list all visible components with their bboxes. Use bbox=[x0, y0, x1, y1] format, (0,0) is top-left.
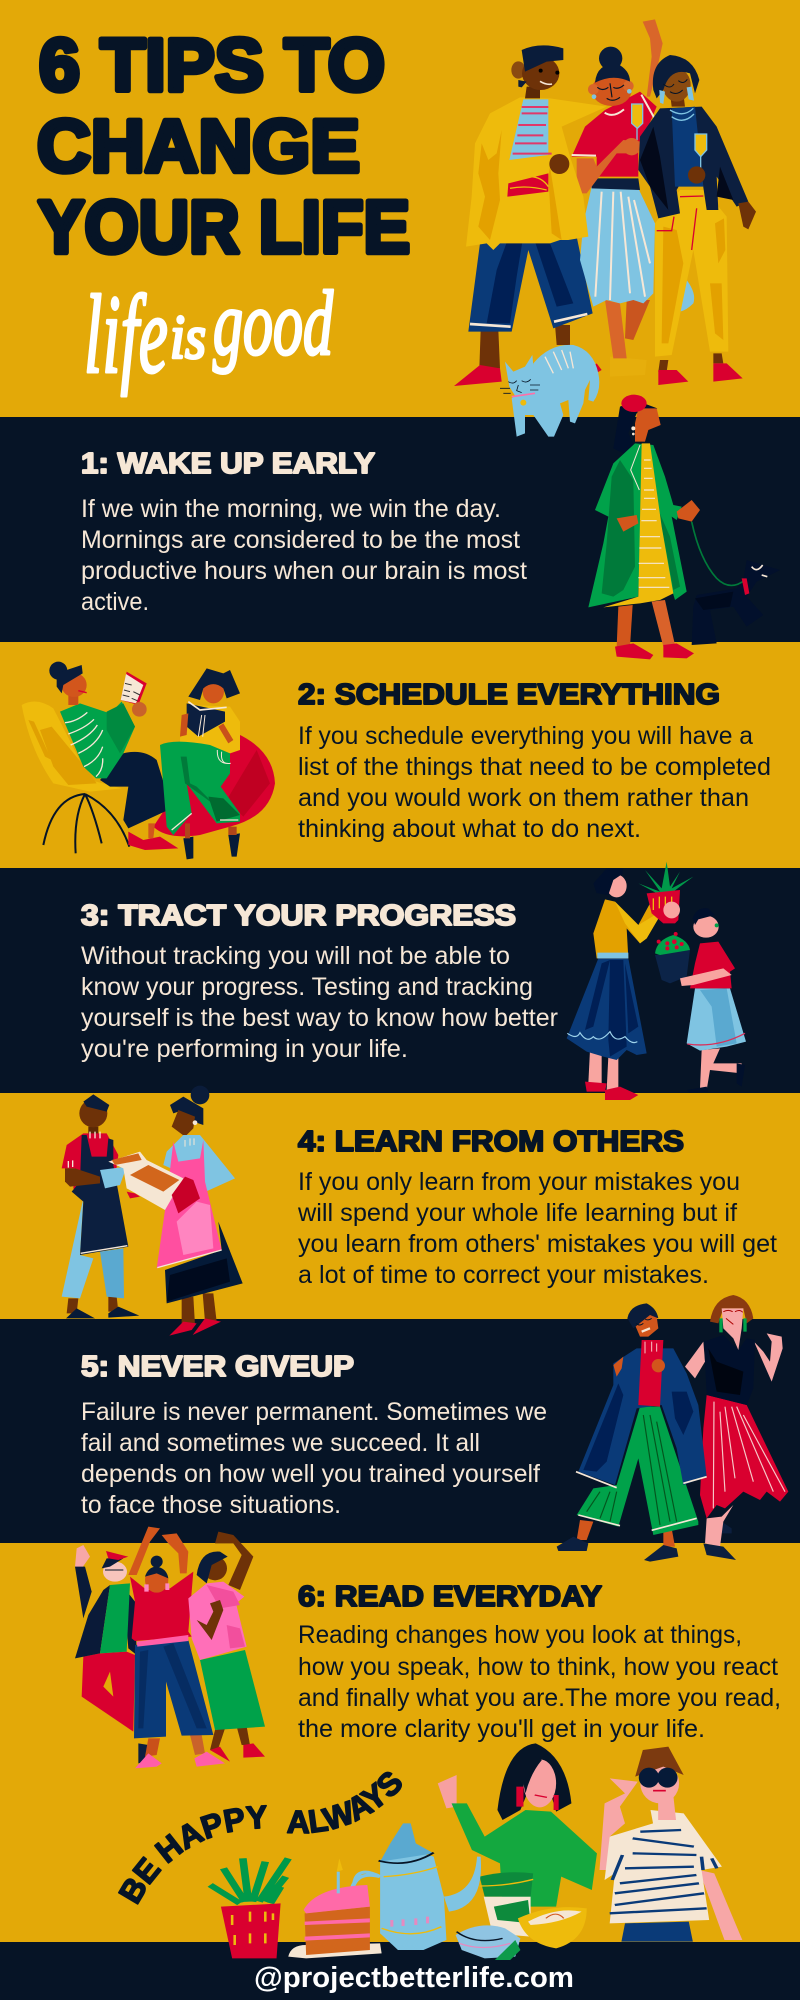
illustration: couple walking bbox=[557, 1295, 788, 1562]
tip 5 body text: depends on how well you trained yourself bbox=[81, 1460, 540, 1488]
tip 3 body text: Without tracking you will not be able to bbox=[81, 942, 510, 970]
yellow chair bbox=[22, 702, 129, 853]
tip 6 body text: how you speak, how to think, how you react bbox=[298, 1653, 778, 1681]
tip 5 body text bbox=[81, 1398, 547, 1519]
tip 6 body text bbox=[298, 1621, 781, 1743]
tip 4 body text bbox=[297, 1168, 777, 1289]
baker right bbox=[157, 1086, 243, 1336]
title bbox=[37, 24, 410, 268]
tip 6 heading: 6: READ EVERYDAY bbox=[298, 1581, 602, 1613]
tip 4 body text: a lot of time to correct your mistakes. bbox=[298, 1261, 709, 1289]
tip 5 body text: fail and sometimes we succeed. It all bbox=[81, 1429, 480, 1457]
tip 5 heading: 5: NEVER GIVEUP bbox=[81, 1351, 354, 1383]
panel: footer background bbox=[0, 1942, 800, 2000]
tip 4 body text: you learn from others' mistakes you will get bbox=[298, 1230, 777, 1258]
teacup bbox=[456, 1925, 520, 1960]
baker left bbox=[62, 1094, 139, 1318]
woman legs and shoes bbox=[615, 600, 694, 659]
man in striped shirt bbox=[599, 1747, 742, 1942]
illustration: woman and girl with plants bbox=[567, 862, 746, 1100]
title: 6 TIPS TO bbox=[39, 24, 385, 106]
panel: tip 3 background bbox=[0, 868, 800, 1093]
plant held high bbox=[638, 862, 693, 923]
tip 1 body text bbox=[81, 495, 527, 616]
woman in red skirt bbox=[685, 1295, 788, 1560]
tip 5 bbox=[81, 1351, 547, 1519]
cat bbox=[500, 345, 599, 437]
dog leash and dog bbox=[692, 522, 780, 645]
tip 6 body text: Reading changes how you look at things, bbox=[298, 1621, 742, 1649]
woman in green sweater bbox=[438, 1743, 597, 1907]
script lettering: life is good: life bbox=[84, 273, 168, 397]
tip 3 body text: you're performing in your life. bbox=[81, 1035, 408, 1063]
tip 4 body text: will spend your whole life learning but if bbox=[297, 1199, 737, 1227]
baking dish and mitt bbox=[108, 1152, 200, 1213]
woman figure bbox=[567, 868, 663, 1100]
tip 3 heading: 3: TRACT YOUR PROGRESS bbox=[81, 900, 516, 932]
friend middle shirt, head bbox=[572, 47, 657, 193]
tip 2 body text: thinking about what to do next. bbox=[298, 815, 641, 843]
reader right bbox=[160, 668, 240, 859]
jar bbox=[480, 1872, 533, 1937]
panel: tip 5 background bbox=[0, 1319, 800, 1543]
girl figure bbox=[655, 908, 746, 1093]
tip 5 body text: Failure is never permanent. Sometimes we bbox=[81, 1398, 547, 1426]
friend right trousers and shoes bbox=[655, 190, 743, 385]
script lettering: life is good bbox=[84, 272, 334, 397]
reader left bbox=[49, 662, 178, 850]
friend right jacket, head bbox=[638, 55, 756, 229]
friend left trousers bbox=[468, 193, 593, 332]
potted plant bbox=[210, 1858, 288, 1958]
friend in red shirt bbox=[128, 1527, 225, 1768]
tip 3 bbox=[81, 900, 558, 1063]
tip 6 body text: the more clarity you'll get in your life. bbox=[298, 1715, 705, 1743]
tip 3 body text: yourself is the best way to know how better bbox=[81, 1004, 558, 1032]
script lettering: life is good: good bbox=[213, 272, 334, 374]
yellow bowl bbox=[518, 1907, 587, 1948]
illustration: two women reading bbox=[22, 662, 275, 859]
footer handle: @projectbetterlife.com bbox=[254, 1962, 574, 1994]
illustration: three friends and cat bbox=[454, 19, 756, 437]
illustration: still life and two friends at table bbox=[210, 1743, 742, 1960]
tip 4 body text: If you only learn from your mistakes you bbox=[298, 1168, 740, 1196]
tip 3 body text bbox=[81, 942, 558, 1063]
illustration: woman walking black dog bbox=[588, 395, 780, 659]
tip 1 body text: productive hours when our brain is most bbox=[81, 557, 527, 585]
tip 2 body text bbox=[298, 722, 771, 843]
tip 4 bbox=[297, 1126, 777, 1289]
friend in pink shirt bbox=[188, 1532, 265, 1762]
tip 5 body text: to face those situations. bbox=[81, 1491, 341, 1519]
man in blue coat bbox=[557, 1303, 707, 1562]
woman hair and beret bbox=[613, 395, 661, 455]
tip 2 body text: list of the things that need to be completed bbox=[298, 753, 771, 781]
teapot bbox=[351, 1823, 481, 1950]
tip 2 body text: If you schedule everything you will have a bbox=[298, 722, 753, 750]
illustration: three dancing friends bbox=[75, 1527, 265, 1768]
tip 1 bbox=[81, 448, 527, 616]
script lettering: life is good: is bbox=[170, 304, 206, 372]
curved slogan: be happy always: BE HAPPY ALWAYS bbox=[118, 1772, 402, 1905]
red beanbag bbox=[153, 733, 275, 836]
woman green coat bbox=[588, 443, 700, 607]
tip 6 body text: and finally what you are.The more you read, bbox=[298, 1684, 781, 1712]
tip 2 body text: and you would work on them rather than bbox=[298, 784, 749, 812]
friend left cardigan, shirt, head bbox=[466, 45, 607, 250]
friend middle raised arm, legs, skirt bbox=[580, 19, 663, 377]
tip 1 body text: If we win the morning, we win the day. bbox=[81, 495, 501, 523]
illustration: two bakers with dish bbox=[62, 1086, 243, 1336]
tip 6 bbox=[298, 1581, 781, 1743]
title: CHANGE bbox=[37, 104, 360, 188]
tip 2 bbox=[298, 679, 771, 843]
tip 1 body text: Mornings are considered to be the most bbox=[81, 526, 520, 554]
panel: tip 1 background bbox=[0, 417, 800, 642]
cake bbox=[288, 1858, 382, 1958]
friend with beret bbox=[75, 1545, 148, 1763]
tip 1 heading: 1: WAKE UP EARLY bbox=[81, 448, 375, 480]
friend left legs and shoes bbox=[454, 325, 602, 386]
tip 1 body text: active. bbox=[81, 588, 149, 616]
tip 3 body text: know your progress. Testing and tracking bbox=[81, 973, 533, 1001]
tip 2 heading: 2: SCHEDULE EVERYTHING bbox=[298, 679, 720, 711]
title: YOUR LIFE bbox=[38, 186, 410, 268]
tip 4 heading: 4: LEARN FROM OTHERS bbox=[298, 1126, 684, 1158]
